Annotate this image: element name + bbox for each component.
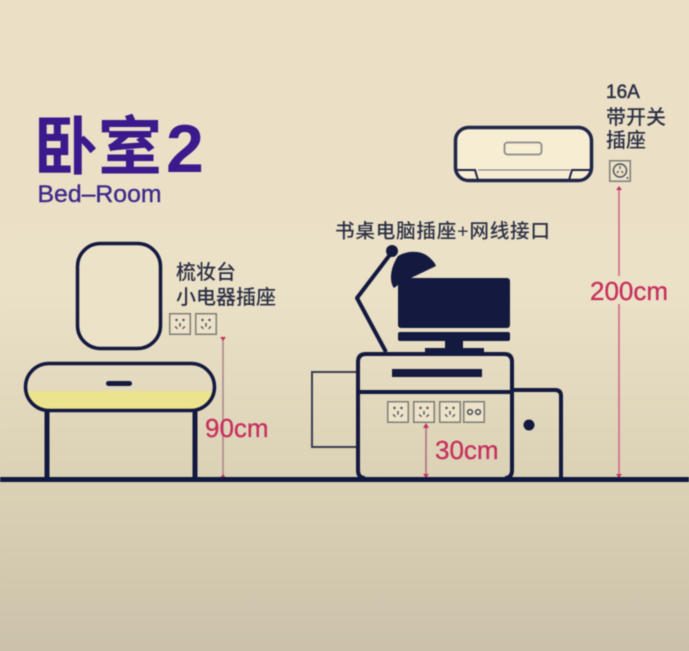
dimension: 200cm: 200cm (590, 276, 668, 306)
dimension: 30cm: 30cm (435, 435, 499, 465)
desk lamp (357, 245, 436, 352)
vanity table (26, 364, 214, 478)
side box left of desk (312, 372, 357, 447)
AC socket label: 插座 (606, 129, 646, 152)
vanity sockets (170, 314, 216, 334)
dimension: 30cm (423, 423, 499, 478)
AC socket label: 16A (606, 82, 640, 103)
table yellow band (27, 391, 214, 409)
AC socket label: 带开关 (606, 106, 666, 129)
network port (464, 402, 484, 422)
vanity mirror (78, 244, 160, 348)
dimension: 90cm (205, 337, 269, 478)
vanity label: 梳妆台 (176, 261, 236, 284)
dimension: 90cm: 90cm (205, 413, 269, 443)
desk (358, 354, 512, 478)
dimension: 200cm (590, 186, 668, 478)
title: english subtitle: Bed–Room (38, 181, 162, 208)
title (34, 111, 204, 208)
table top (26, 364, 214, 410)
desk sockets (388, 402, 484, 422)
AC socket (610, 161, 630, 181)
desk label: 书桌电脑插座+网线接口 (335, 220, 550, 242)
table handle (106, 381, 132, 386)
vanity label: 小电器插座 (176, 286, 276, 309)
floor line (0, 477, 689, 482)
table legs (47, 411, 195, 478)
title: chinese heading: 卧室 (34, 112, 162, 184)
monitor (398, 278, 510, 354)
title: number 2: 2 (166, 111, 204, 187)
side cabinet (513, 390, 561, 478)
air conditioner (456, 128, 592, 180)
